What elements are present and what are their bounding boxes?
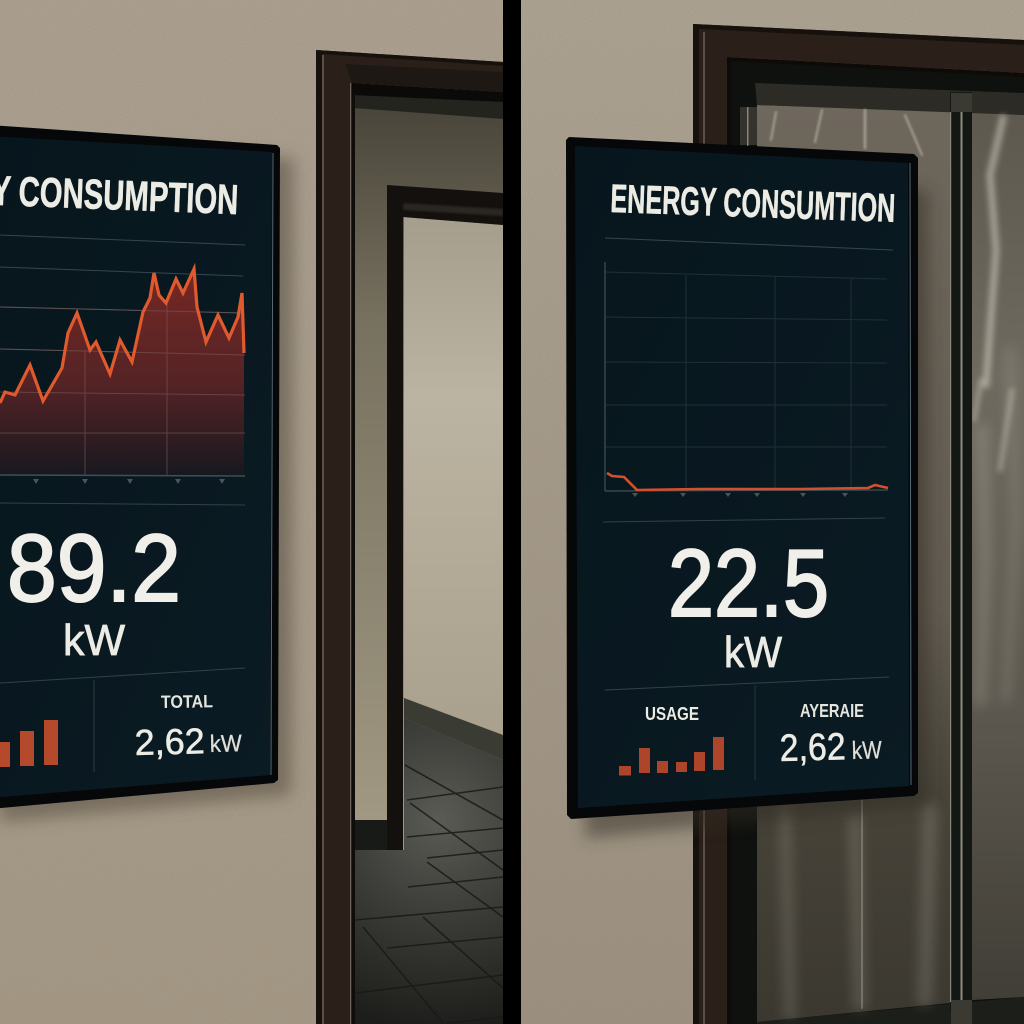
total label: TOTAL bbox=[161, 691, 213, 712]
main reading: 22.5 bbox=[668, 530, 829, 637]
panel: right scene bbox=[521, 0, 1024, 1024]
screen shadow bbox=[585, 190, 928, 838]
total value: 2,62 bbox=[134, 720, 205, 763]
screen: right display bbox=[566, 137, 918, 819]
screen: left display bbox=[0, 125, 280, 809]
unit: kW bbox=[724, 628, 782, 677]
inner door frame bbox=[387, 185, 503, 850]
doorway header shadow bbox=[353, 94, 503, 119]
center divider bbox=[503, 0, 521, 1024]
main reading: 89.2 bbox=[7, 515, 181, 622]
usage label: USAGE bbox=[645, 704, 699, 724]
average unit: kW bbox=[851, 736, 882, 765]
plastic folds bbox=[771, 110, 1016, 1015]
total unit: kW bbox=[209, 730, 242, 758]
door frame bbox=[693, 24, 1024, 1024]
screen shadow bbox=[0, 145, 294, 822]
curtained door opening bbox=[727, 57, 1024, 1024]
doorway interior: corridor bbox=[353, 100, 503, 1024]
usage bars bbox=[619, 737, 724, 776]
usage bars bbox=[0, 720, 58, 767]
title: Y CONSUMPTION bbox=[0, 167, 239, 223]
average label: AYERAIE bbox=[800, 701, 864, 721]
line chart bbox=[605, 262, 888, 497]
unit: kW bbox=[63, 616, 125, 665]
average value: 2,62 bbox=[779, 726, 846, 770]
area chart bbox=[0, 235, 245, 484]
outer door frame bbox=[316, 50, 503, 1024]
panel: left scene bbox=[0, 0, 503, 1024]
center mullion bbox=[950, 92, 972, 1024]
